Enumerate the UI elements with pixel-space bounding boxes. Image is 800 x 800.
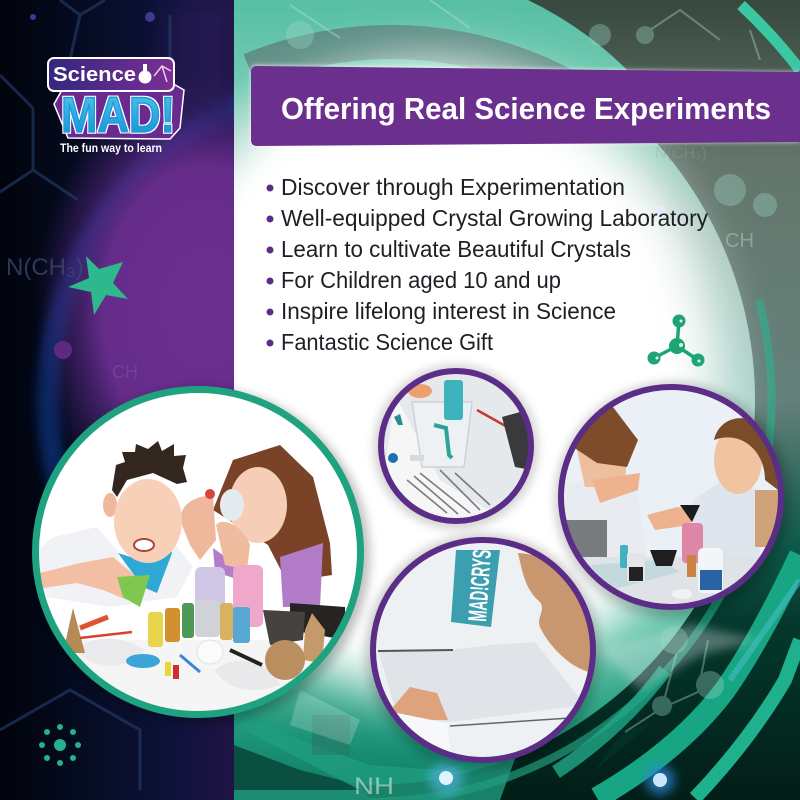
photo circle: child reading instructions: [365, 534, 601, 770]
logo: Science plate: [48, 58, 174, 91]
icon: green star: [68, 256, 128, 315]
product box label: MAD!CRYS: [462, 549, 497, 622]
bullet: gift: Fantastic Science Gift: [281, 329, 494, 355]
panel: left dark purple background: [0, 0, 234, 800]
icon: molecule: [648, 314, 704, 366]
title banner: [251, 65, 800, 146]
bottles: [195, 567, 225, 609]
photo circle: experiment beaker: [374, 365, 538, 530]
girl hair: [213, 445, 332, 582]
bullet: laboratory: Well-equipped Crystal Growing Laboratory: [281, 205, 708, 231]
wood pieces: [66, 608, 85, 653]
icon: logo flask: [138, 64, 171, 84]
logo tagline: The fun way to learn: [60, 143, 162, 155]
bullet list: [266, 174, 708, 355]
boy coat: [38, 527, 193, 607]
boy head: [103, 493, 117, 517]
bullet: experimentation: Discover through Experimentation: [281, 174, 625, 200]
bullet: crystals: Learn to cultivate Beautiful Crystals: [281, 236, 631, 262]
photo circle: children with crystal kit: [30, 388, 370, 725]
icon: dotted circle: [39, 724, 81, 766]
panel: left dark purple background: CH: [112, 362, 138, 382]
panel: left dark purple background: N(CH₃): [6, 254, 84, 281]
logo: purple backdrop: [54, 82, 184, 139]
bottom panels: [234, 745, 370, 800]
boy arm: [40, 557, 140, 600]
green beaker: [117, 575, 150, 607]
blue light spots: [429, 205, 675, 795]
logo: MAD! word: MAD!: [61, 87, 175, 143]
panel: right glowing background: N(CH₃): [655, 145, 707, 162]
girl hands: [180, 496, 216, 560]
black trays: [290, 603, 345, 640]
faint molecule lines: [286, 0, 777, 732]
small kit pieces: [126, 654, 160, 668]
logo: Science word: Science: [53, 64, 136, 86]
photo circle: children observing: [555, 382, 791, 620]
panel: right glowing background: NH: [354, 773, 394, 800]
title: Offering Real Science Experiments: [281, 91, 771, 126]
girl dress: [280, 543, 323, 607]
boy shirt: [118, 547, 172, 593]
logo: Science Mad!: [48, 58, 184, 155]
panel: right glowing background: [234, 0, 800, 800]
teal bands: [369, 1, 800, 800]
bullet: age: For Children aged 10 and up: [281, 267, 561, 293]
white glow: [140, 65, 720, 695]
girl face: [229, 467, 287, 543]
panel: right glowing background: CH: [725, 230, 754, 252]
table: [76, 640, 330, 711]
bullet: interest: Inspire lifelong interest in Science: [281, 298, 616, 324]
